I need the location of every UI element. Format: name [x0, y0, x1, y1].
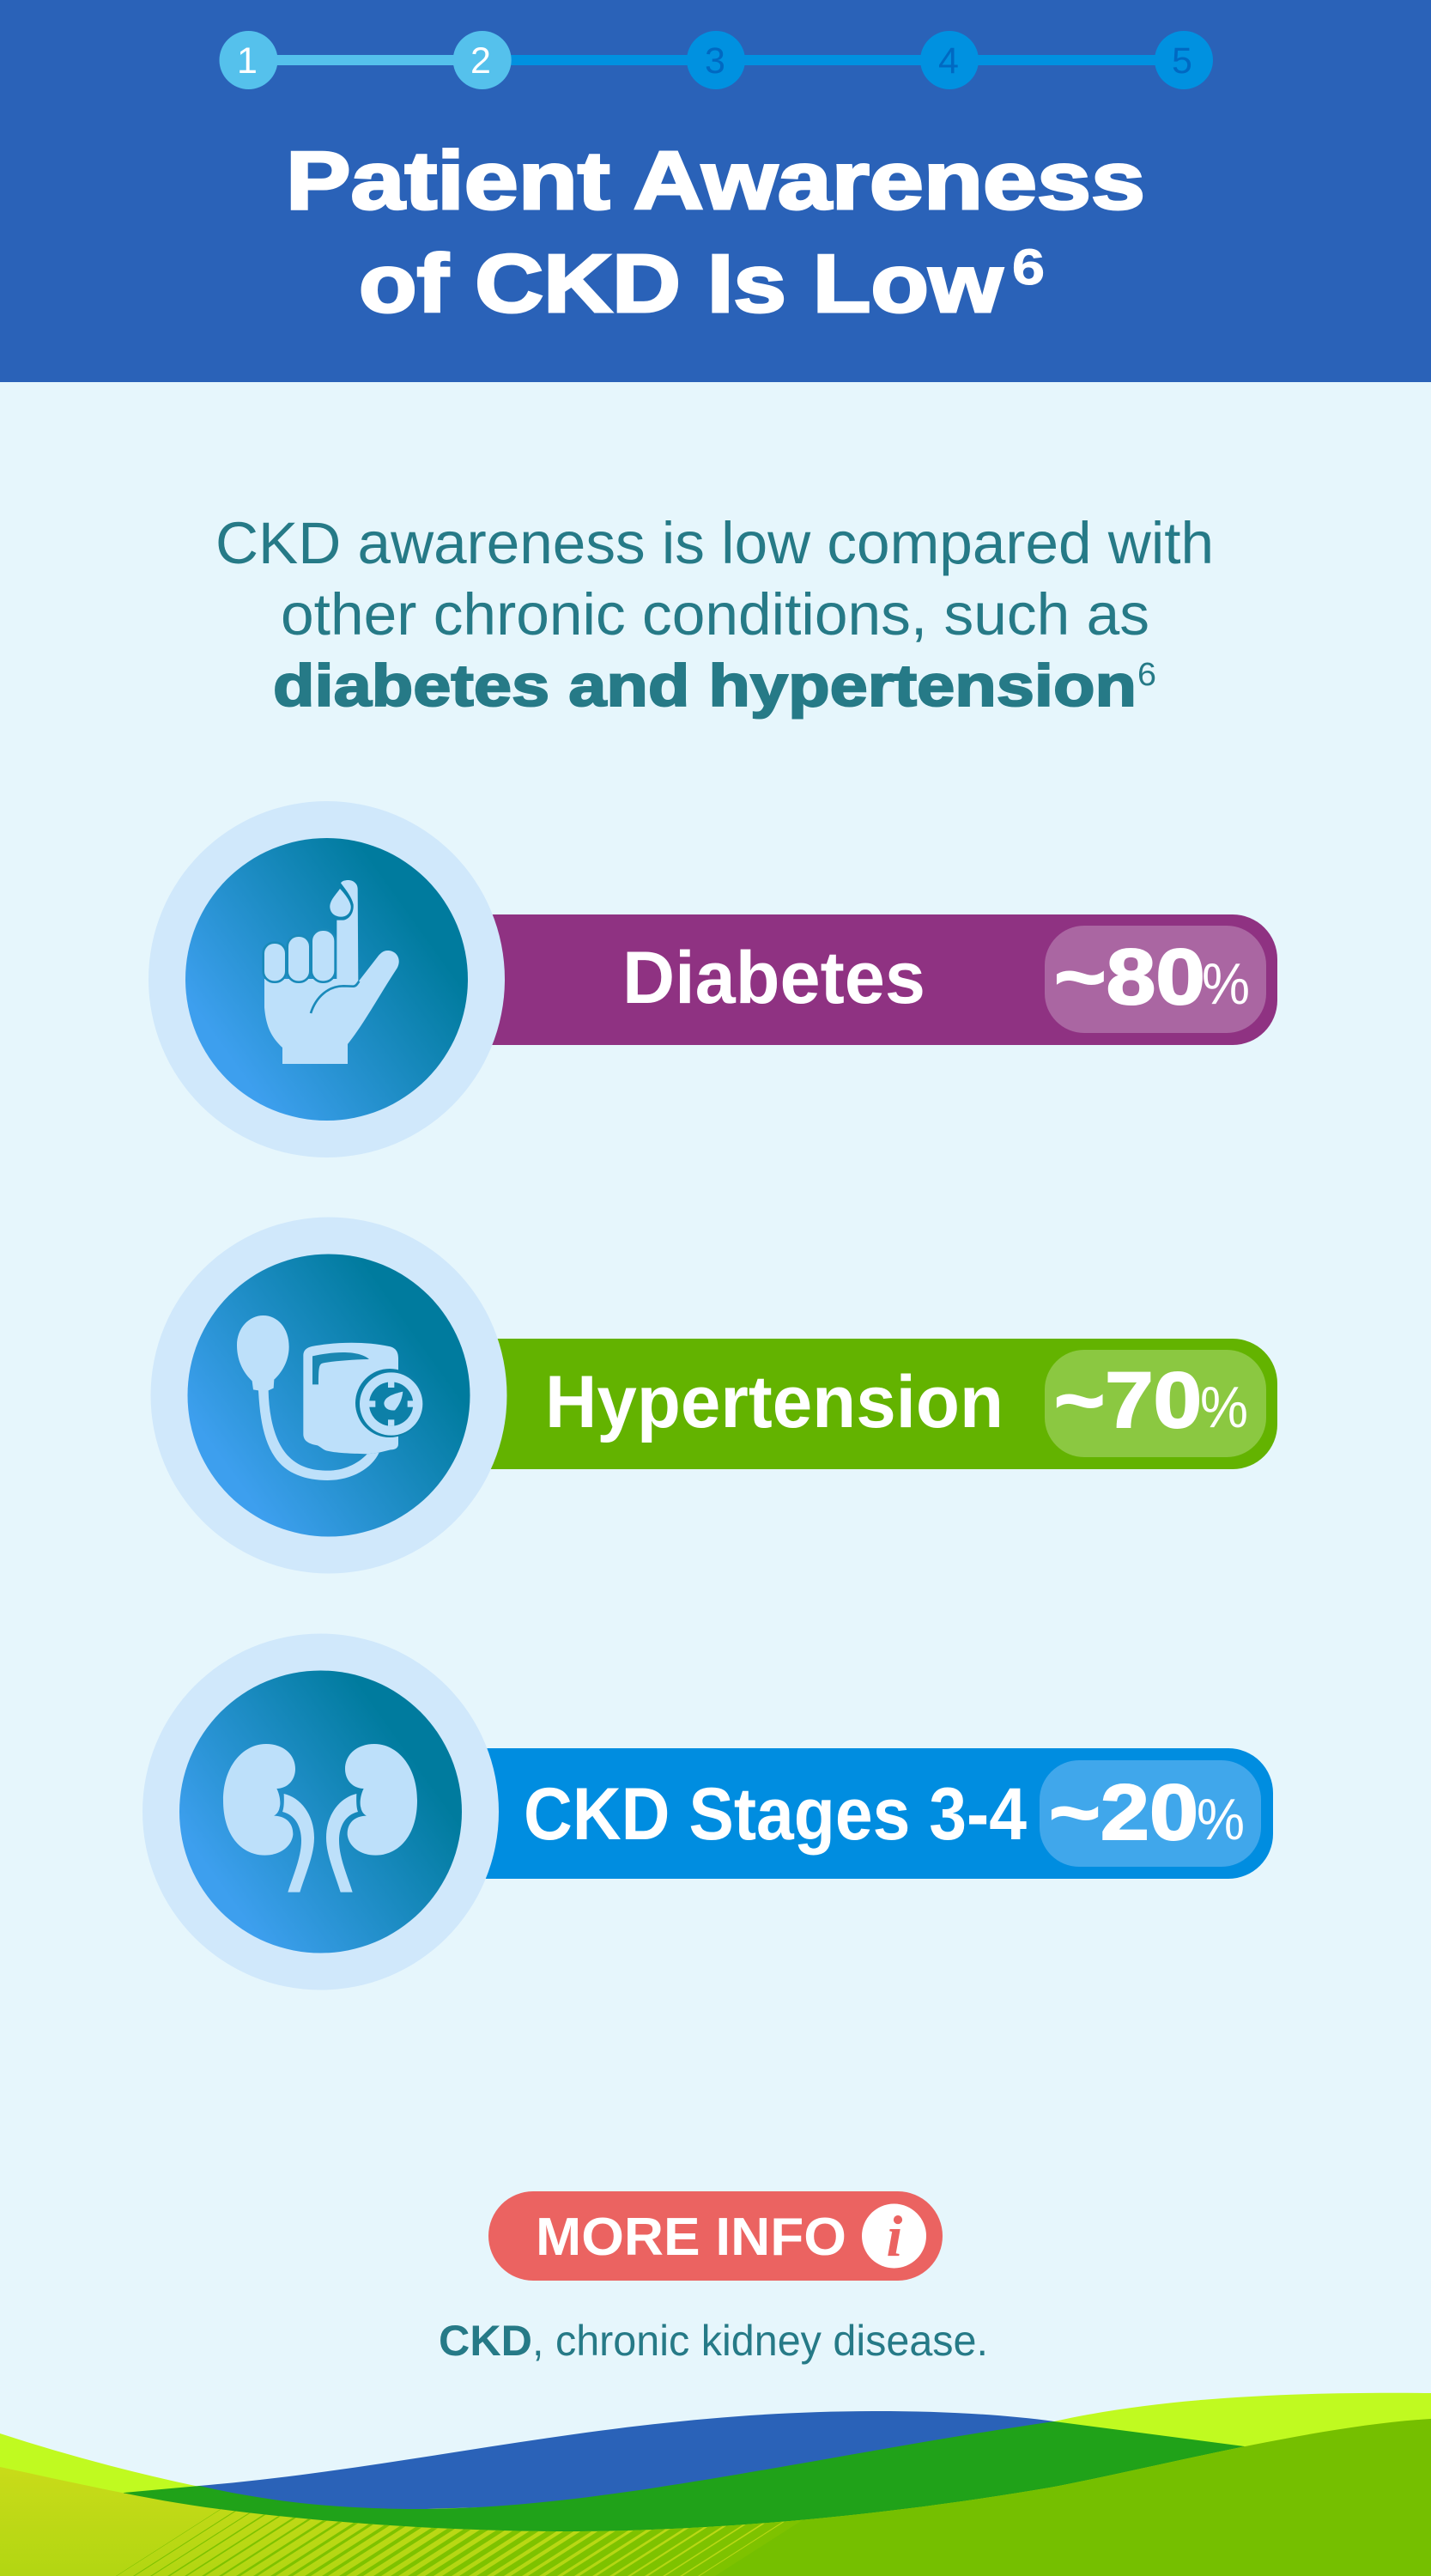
panel: diabetes bar — [361, 914, 1277, 1045]
icon: info — [862, 2203, 926, 2269]
header band — [0, 0, 1431, 382]
CKD percentage pill — [1040, 1760, 1261, 1867]
hypertension percentage pill — [1045, 1350, 1266, 1457]
footnote: , chronic kidney disease. — [532, 2317, 988, 2365]
panel: CKD stages bar — [361, 1748, 1273, 1879]
step progress tracker: 1 — [237, 40, 258, 82]
diabetes percentage pill — [1045, 926, 1266, 1033]
step progress tracker: 3 — [705, 40, 725, 82]
CKD label: CKD Stages 3-4 — [524, 1773, 1027, 1856]
icon: kidneys — [142, 1633, 499, 1990]
hypertension label: Hypertension — [545, 1361, 1004, 1443]
diabetes value: % — [1202, 951, 1250, 1017]
panel: hypertension bar — [361, 1339, 1277, 1469]
intro text: diabetes and hypertension — [273, 653, 1137, 719]
hypertension value: % — [1200, 1375, 1248, 1440]
CKD value — [1049, 1769, 1245, 1856]
title: 6 — [1012, 240, 1045, 295]
step progress tracker: 4 — [938, 40, 959, 82]
icon: info: i — [887, 2203, 903, 2269]
footnote: CKD — [439, 2317, 532, 2365]
bottom wave decoration — [0, 2393, 1431, 2576]
intro text: 6 — [1137, 657, 1156, 693]
diabetes value — [1054, 933, 1250, 1021]
step progress tracker: 5 — [1172, 40, 1192, 82]
diabetes label: Diabetes — [622, 937, 925, 1019]
more info button: MORE INFO — [536, 2208, 846, 2267]
icon: blood pressure cuff — [151, 1218, 506, 1573]
icon: finger prick with blood drop — [149, 801, 505, 1157]
step progress tracker: 2 — [470, 40, 491, 82]
CKD value: ~20 — [1049, 1769, 1198, 1856]
hypertension value: ~70 — [1054, 1357, 1202, 1444]
more info button — [488, 2191, 943, 2281]
hypertension value — [1054, 1357, 1248, 1444]
title: of CKD Is Low — [359, 238, 1003, 330]
intro text: CKD awareness is low compared with — [215, 510, 1214, 576]
diabetes value: ~80 — [1054, 933, 1205, 1021]
title — [286, 135, 1145, 330]
intro text — [215, 510, 1214, 719]
title: Patient Awareness — [286, 135, 1145, 227]
intro text: other chronic conditions, such as — [281, 581, 1149, 647]
CKD value: % — [1197, 1787, 1245, 1852]
step progress tracker — [220, 31, 1213, 89]
